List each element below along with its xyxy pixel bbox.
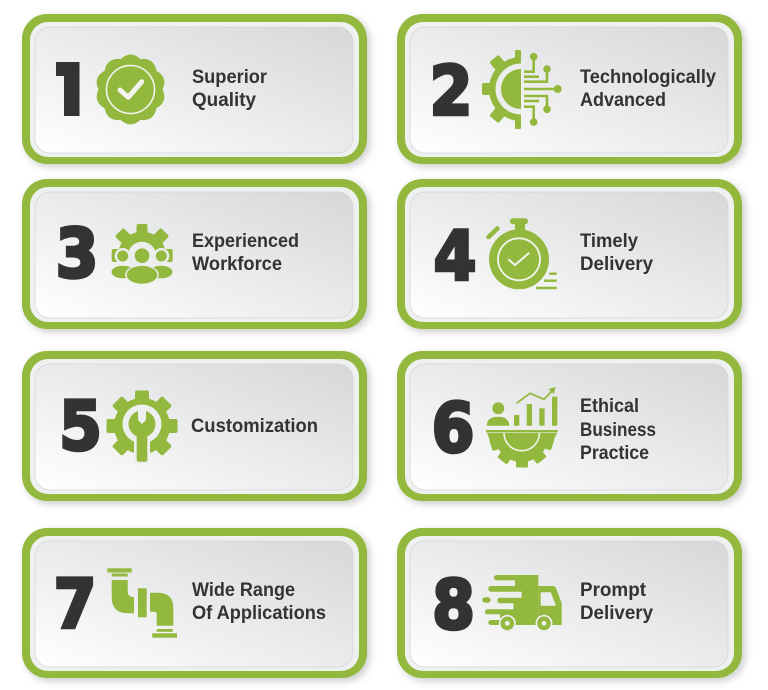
label: Timely Delivery: Delivery — [580, 253, 653, 275]
number 8: 8 — [432, 566, 475, 645]
panel: card 6 Ethical Business Practice — [397, 351, 742, 501]
icon: person, growth chart and half gear — [486, 387, 558, 468]
label: Technologically Advanced: Technologically — [580, 66, 716, 88]
number 4: 4 — [434, 217, 476, 296]
label: Superior Quality: Superior — [192, 66, 267, 88]
label: Timely Delivery — [580, 230, 653, 275]
label: Superior Quality: Quality — [192, 89, 256, 111]
icon: fast delivery truck — [482, 575, 562, 632]
icon: pipe fittings — [107, 568, 177, 638]
icon: quality badge with check — [97, 55, 164, 124]
number 5: 5 — [59, 387, 102, 466]
panel: card 3 Experienced Workforce — [22, 179, 367, 329]
label: Technologically Advanced — [580, 66, 716, 111]
number 1 — [56, 62, 80, 116]
panel: card 4 Timely Delivery — [397, 179, 742, 329]
number 7: 7 — [54, 565, 96, 644]
label: Prompt Delivery — [580, 579, 653, 624]
panel: card 1 Superior Quality — [22, 14, 367, 164]
label: Experienced Workforce — [192, 230, 299, 275]
label: Superior Quality — [192, 66, 267, 111]
label: Prompt Delivery: Delivery — [580, 602, 653, 624]
panel: card 2 Technologically Advanced — [397, 14, 742, 164]
icon: gear with wrench — [106, 390, 178, 464]
number 2: 2 — [430, 52, 472, 131]
number 6: 6 — [432, 389, 474, 468]
label: Timely Delivery: Timely — [580, 230, 638, 252]
label: Wide Range Of Applications — [192, 579, 326, 624]
icon: gear with three people — [112, 224, 173, 285]
label: Ethical Business Practice: Business — [580, 419, 656, 441]
label: Technologically Advanced: Advanced — [580, 89, 666, 111]
label: Prompt Delivery: Prompt — [580, 579, 646, 601]
label: Experienced Workforce: Workforce — [192, 253, 282, 275]
panel: card 5 Customization — [22, 351, 367, 501]
label: Wide Range Of Applications: Wide Range — [192, 579, 295, 601]
label: Ethical Business Practice — [580, 395, 656, 464]
panel: card 8 Prompt Delivery — [397, 528, 742, 678]
label: Ethical Business Practice: Practice — [580, 442, 649, 464]
number 1: 1 — [51, 52, 93, 131]
icon: stopwatch with check — [488, 218, 557, 289]
panel: card 7 Wide Range Of Applications — [22, 528, 367, 678]
label: Customization: Customization — [191, 415, 318, 437]
label: Ethical Business Practice: Ethical — [580, 395, 639, 417]
icon: half gear with circuit lines — [482, 50, 562, 129]
label: Wide Range Of Applications: Of Applications — [192, 602, 326, 624]
number 3: 3 — [56, 215, 98, 294]
label: Experienced Workforce: Experienced — [192, 230, 299, 252]
